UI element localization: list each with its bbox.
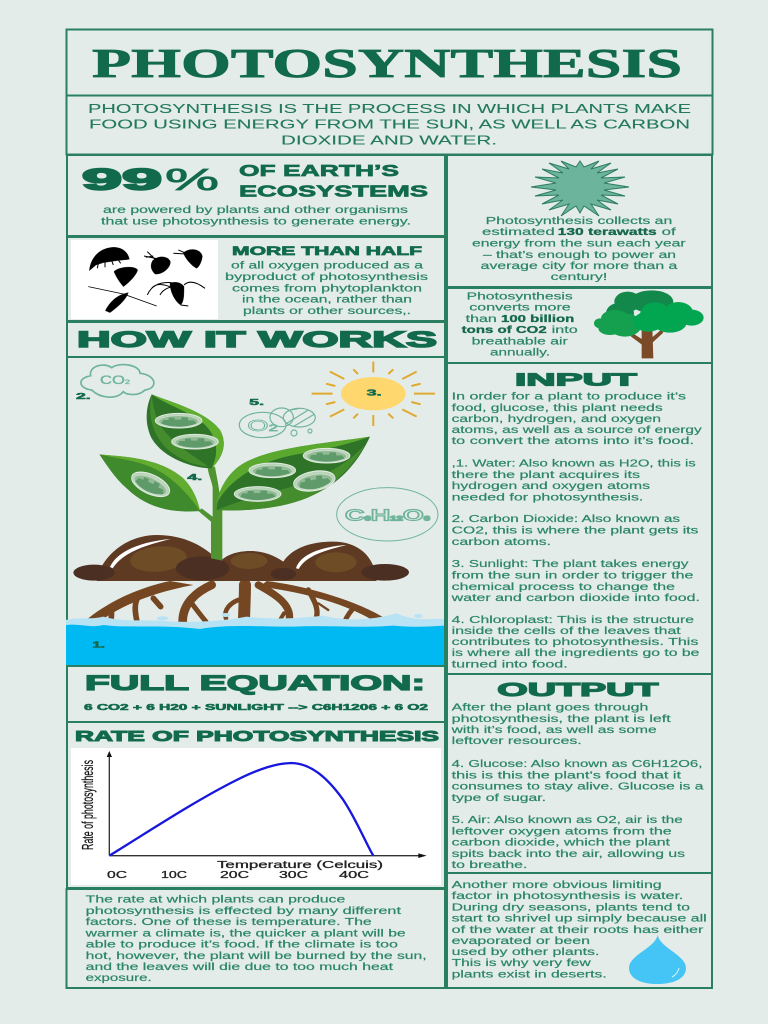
panel: input: is where all the ingredients go to be — [452, 648, 700, 659]
panel: CO2 fact: 100 billion — [501, 314, 574, 325]
panel: input: carbon, hydrogen, and oxygen — [452, 414, 661, 425]
panel: title — [66, 30, 712, 96]
panel: temperature explanation: hot, however, the plant will be burned by the sun, — [86, 951, 427, 962]
image: plankton silhouettes — [71, 240, 218, 319]
icon: sun — [312, 362, 435, 426]
panel: output: OUTPUT — [497, 680, 658, 700]
panel: water limiting factor: of the water at their roots has either — [452, 925, 704, 936]
panel: output: 5. Air: Also known as O2, air is the — [452, 815, 683, 826]
panel: phytoplankton: plants or other sources,. — [243, 306, 411, 317]
panel: water limiting factor: During dry seasons, plants tend to — [452, 902, 691, 914]
panel: input: water and carbon dioxide into food. — [450, 593, 700, 604]
panel: CO2 fact: converts more — [469, 302, 571, 314]
icon: O2 bubbles — [239, 408, 315, 438]
panel: input: to convert the atoms into it’s food. — [452, 436, 694, 447]
panel: output — [447, 674, 712, 873]
illustration: roots — [87, 581, 387, 622]
panel: output: spits back into the air, allowing us — [452, 849, 685, 860]
panel: output: leftover resources. — [452, 736, 582, 747]
chart: rate vs temperature: 40C — [339, 869, 370, 881]
panel: phytoplankton: in the ocean, rather than — [242, 294, 412, 306]
panel: temperature explanation — [66, 889, 445, 988]
panel: input: from the sun in order to trigger the — [452, 570, 694, 582]
chart: rate vs temperature: 20C — [220, 869, 250, 881]
panel: terawatts fact: of — [662, 227, 676, 238]
panel: output: photosynthesis, the plant is left — [452, 714, 671, 725]
panel: CO2 fact: annually. — [490, 348, 550, 358]
leaf: left — [99, 454, 200, 512]
panel: output: this is this the plant’s food that it — [452, 770, 681, 782]
panel: 99 percent of ecosystems — [67, 155, 445, 236]
panel: terawatts fact: – that’s enough to power an — [483, 250, 676, 261]
icon: glucose formula: C 6H 12O 6 — [345, 508, 430, 525]
panel: temperature explanation: exposure. — [86, 973, 152, 984]
panel: water limiting factor: plants exist in deserts. — [452, 970, 607, 980]
diagram labels: 4. — [187, 473, 202, 482]
chart: rate vs temperature: 30C — [279, 869, 309, 881]
panel: terawatts fact: estimated — [482, 227, 555, 238]
panel: output: leftover oxygen atoms from the — [452, 826, 672, 838]
panel: input: chemical process to change the — [452, 582, 676, 593]
panel: input: inside the cells of the leaves that — [452, 626, 681, 637]
panel: input: INPUT — [515, 369, 637, 389]
panel: phytoplankton: byproduct of photosynthesis — [225, 272, 428, 283]
panel: input: contributes to photosynthesis. This — [452, 637, 698, 648]
chart: rate vs temperature: Rate of photosynthesis — [80, 760, 97, 850]
icon: tree — [594, 290, 704, 358]
panel: rate of photosynthesis: RATE OF PHOTOSYNTHESIS — [75, 728, 439, 745]
panel: water limiting factor: This is why very few — [452, 958, 592, 969]
panel: phytoplankton — [67, 237, 445, 321]
panel: plant diagram — [66, 357, 445, 665]
icon: glucose formula — [337, 488, 438, 541]
panel: temperature explanation: photosynthesis is effected by many different — [86, 906, 401, 917]
panel: input: 2. Carbon Dioxide: Also known as — [452, 514, 680, 525]
panel: temperature explanation: able to produce it’s food. If the climate is too — [86, 940, 399, 950]
heading: more than half: MORE THAN HALF — [232, 244, 422, 258]
panel: terawatts fact: energy from the sun each year — [472, 238, 687, 250]
panel: CO2 fact: into — [552, 325, 578, 336]
diagram labels: 3. — [367, 389, 382, 398]
illustration: water — [66, 613, 444, 665]
panel: output: After the plant goes through — [452, 702, 648, 714]
panel: CO2 fact: Photosynthesis — [467, 292, 573, 302]
big number: 99% — [82, 162, 219, 197]
panel: input: there the plant acquires its — [452, 470, 640, 481]
panel: water limiting factor: used by other plants. — [452, 947, 599, 958]
panel: 99 percent of ecosystems: OF EARTH’S — [239, 163, 400, 180]
panel: definition — [66, 96, 712, 154]
panel: CO2 fact: than — [466, 314, 497, 325]
panel: water limiting factor — [447, 873, 712, 988]
chart: rate vs temperature: Temperature (Celcuis) — [217, 859, 383, 871]
chart: rate vs temperature: 10C — [161, 869, 188, 881]
panel: full equation: FULL EQUATION: — [85, 672, 425, 695]
panel: output: to breathe. — [452, 860, 527, 871]
panel: temperature explanation: The rate at which plants can produce — [86, 894, 346, 906]
diagram labels — [76, 389, 382, 649]
panel: water limiting factor: Another more obvious limiting — [452, 880, 662, 891]
panel: input — [447, 363, 712, 674]
panel: input: CO2, this is where the plant gets its — [452, 526, 698, 536]
panel: definition: PHOTOSYNTHESIS IS THE PROCESS IN WHICH PLANTS MAKE — [88, 101, 691, 116]
panel: terawatts fact: Photosynthesis collects an — [486, 216, 672, 227]
panel: temperature explanation: warmer a climate is, the quicker a plant will be — [84, 928, 406, 940]
panel: input: food, glucose, this plant needs — [452, 403, 663, 414]
panel: input: hydrogen and oxygen atoms — [452, 481, 650, 492]
diagram labels: 1. — [92, 640, 105, 649]
icon: CO2 cloud: CO 2 — [100, 373, 130, 387]
panel: how it works heading — [67, 322, 445, 357]
panel: output: 4. Glucose: Also known as C6H12O6, — [452, 759, 702, 770]
panel: input: carbon atoms. — [452, 537, 551, 548]
panel: CO2 fact: tons of CO2 — [462, 325, 547, 336]
panel: definition: DIOXIDE AND WATER. — [281, 132, 497, 148]
panel: phytoplankton: comes from phytoplankton — [232, 284, 422, 294]
panel: input: 3. Sunlight: The plant takes energy — [452, 559, 688, 570]
leaf: right — [217, 437, 370, 510]
panel: 99 percent of ecosystems: are powered by plants and other organisms — [103, 205, 408, 216]
panel: output: carbon dioxide, which the plant — [452, 838, 670, 848]
icon: starburst — [531, 161, 629, 216]
panel: phytoplankton: of all oxygen produced as a — [231, 260, 424, 272]
panel: full equation: 6 CO2 + 6 H20 + SUNLIGHT --> C6H1206 + 6 O2 — [84, 702, 428, 712]
big number: 99%: % — [165, 162, 219, 197]
panel: how it works heading: HOW IT WORKS — [77, 327, 437, 352]
panel: input: atoms, as well as a source of energy — [452, 425, 702, 436]
panel: terawatts fact: 130 terawatts — [558, 227, 657, 238]
icon: O2 bubbles: O 2 — [247, 418, 278, 435]
panel: input: turned into food. — [452, 660, 568, 670]
panel: input: ,1. Water: Also known as H2O, this is — [452, 458, 696, 470]
panel: temperature explanation: and the leaves will die due to too much heat — [86, 962, 393, 973]
panel: output: consumes to stay alive. Glucose is a — [452, 782, 704, 792]
heading: Photosynthesis: PHOTOSYNTHESIS — [92, 40, 682, 86]
panel: water limiting factor: evaporated or been — [452, 936, 590, 947]
icon: water drop — [629, 935, 686, 984]
icon: CO2 cloud — [81, 365, 154, 397]
panel: water limiting factor: factor in photosynthesis is water. — [452, 891, 683, 902]
illustration: stem and leaves — [99, 394, 370, 561]
panel: CO2 fact: breathable air — [472, 336, 569, 348]
big number: 99%: 99 — [82, 164, 162, 196]
panel: input: 4. Chloroplast: This is the structure — [452, 615, 695, 626]
panel: output: with it’s food, as well as some — [450, 725, 657, 736]
panel: temperature explanation: factors. One of these is temperature. The — [86, 917, 372, 928]
leaf: top — [147, 394, 224, 468]
chart: rate vs temperature: 0C — [107, 869, 128, 881]
panel: 99 percent of ecosystems: ECOSYSTEMS — [239, 184, 429, 200]
panel: 99 percent of ecosystems: that use photosynthesis to generate energy. — [101, 216, 411, 228]
panel: input: needed for photosynthesis. — [452, 492, 643, 504]
panel: input: In order for a plant to produce it’s — [452, 392, 686, 402]
panel: rate of photosynthesis — [67, 722, 445, 888]
panel: full equation — [67, 666, 445, 722]
diagram labels: 2. — [76, 392, 91, 401]
panel: terawatts fact: average city for more than a — [481, 261, 678, 272]
panel: terawatts fact — [447, 155, 712, 287]
panel: definition: FOOD USING ENERGY FROM THE SUN, AS WELL AS CARBON — [89, 116, 690, 132]
panel: CO2 fact — [447, 288, 712, 363]
illustration: soil mounds — [73, 535, 409, 581]
panel: output: type of sugar. — [452, 793, 546, 804]
chart: rate vs temperature — [71, 748, 441, 885]
panel: water limiting factor: start to shrivel up simply because all — [452, 914, 707, 924]
diagram labels: 5. — [249, 398, 264, 407]
panel: terawatts fact: century! — [551, 272, 607, 283]
